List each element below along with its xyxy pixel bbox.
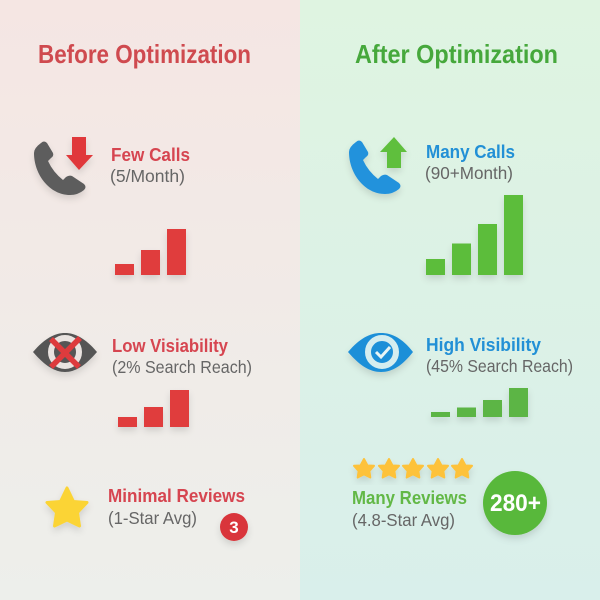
text: minimal reviews: Minimal Reviews	[108, 485, 245, 506]
bar chart: many calls	[426, 195, 523, 275]
text: many calls: Many Calls	[426, 141, 515, 162]
text: one star average: (1-Star Avg)	[108, 508, 197, 528]
text: low visiability: Low Visiability	[112, 335, 229, 356]
text: few calls: Few Calls	[111, 144, 190, 165]
badge: 3 reviews: 3	[229, 518, 239, 537]
heading: after optimization: After Optimization	[355, 39, 558, 69]
badge: 280+ reviews: 280+	[490, 490, 541, 517]
icon: five stars	[354, 459, 472, 478]
text: 90 plus per month: (90+Month)	[425, 163, 513, 183]
icon: single star	[47, 488, 87, 526]
panel: before optimization	[0, 0, 300, 600]
text: many reviews: Many Reviews	[352, 487, 467, 508]
heading: before optimization: Before Optimization	[38, 39, 251, 69]
panel: after optimization	[300, 0, 600, 600]
icon: crossed out eye	[33, 333, 97, 372]
icon: phone with up arrow	[349, 137, 407, 194]
text: high visibility: High Visibility	[426, 334, 542, 355]
text: search reach 45 percent: (45% Search Reach)	[426, 356, 573, 376]
icon: eye with check	[348, 333, 413, 372]
icon: phone with down arrow	[34, 137, 93, 195]
badge: 3 reviews	[220, 513, 248, 541]
badge: 280+ reviews	[483, 471, 547, 535]
text: search reach 2 percent: (2% Search Reach)	[112, 357, 252, 377]
text: 4.8 star average: (4.8-Star Avg)	[352, 510, 455, 530]
bar chart: few calls	[115, 229, 186, 275]
bar chart: high visibility	[431, 388, 528, 417]
text: 5 per month: (5/Month)	[110, 166, 185, 186]
bar chart: low visibility	[118, 390, 189, 427]
